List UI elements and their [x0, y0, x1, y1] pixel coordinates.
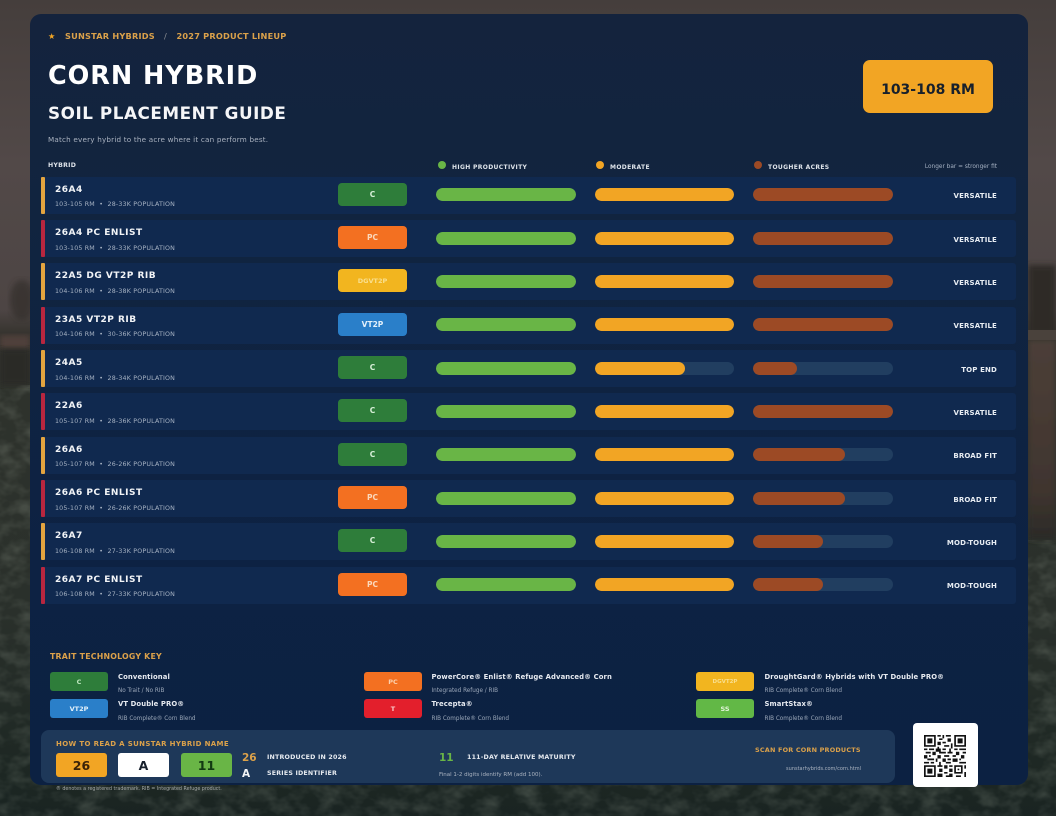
row: 26A7: C — [370, 536, 375, 545]
header eyebrow: SUNSTAR HYBRIDS — [65, 31, 155, 41]
row: 26A7 PC ENLIST: MOD-TOUGH — [947, 582, 997, 590]
trait: PowerCore: PC — [388, 678, 398, 686]
legend: high productivity: HIGH PRODUCTIVITY — [452, 164, 527, 171]
trait: conventional: C — [77, 678, 81, 686]
explanation: series: SERIES IDENTIFIER — [267, 770, 337, 777]
name box: 11: 11 — [198, 758, 215, 773]
trait: PowerCore — [364, 672, 612, 694]
trait key heading: TRAIT TECHNOLOGY KEY — [50, 652, 162, 661]
column header: hybrid: HYBRID — [48, 162, 76, 169]
explanation: maturity: 11 — [439, 752, 454, 764]
row: 22A5 DG VT2P RIB: VERSATILE — [954, 279, 997, 287]
name box: 11 — [181, 753, 232, 777]
tagline: Match every hybrid to the acre where it can perform best. — [48, 135, 268, 144]
row: 26A4 — [41, 177, 1016, 214]
header eyebrow: ★ — [48, 31, 55, 41]
trait: conventional: Conventional — [118, 673, 170, 681]
row: 26A6 PC ENLIST — [41, 480, 1016, 517]
trait: SmartStax: RIB Complete® Corn Blend — [764, 716, 842, 722]
trait: Trecepta: T — [391, 705, 395, 713]
explanation: series — [242, 768, 337, 780]
row: 26A6: 26A6 — [55, 445, 83, 455]
row: 22A6: VERSATILE — [954, 409, 997, 417]
row: 26A7 — [41, 523, 1016, 560]
legend: tougher acres: TOUGHER ACRES — [768, 164, 829, 171]
row: 26A4 PC ENLIST — [41, 220, 1016, 257]
row: 22A5 DG VT2P RIB: DGVT2P — [358, 277, 387, 285]
row: 26A7 PC ENLIST: 106-108 RM • 27-33K POPULATION — [55, 591, 175, 598]
row: 26A4: C — [370, 190, 375, 199]
row: 26A4 PC ENLIST: 103-105 RM • 28-33K POPULATION — [55, 244, 175, 252]
row: 22A6: C — [370, 406, 375, 415]
maturity badge — [863, 60, 993, 113]
explanation: year — [242, 752, 347, 764]
name box: 26: 26 — [73, 758, 90, 773]
trait: VT Double PRO: VT Double PRO® — [118, 700, 184, 708]
scan heading: SCAN FOR CORN PRODUCTS — [755, 746, 861, 754]
row: 22A5 DG VT2P RIB: 22A5 DG VT2P RIB — [55, 271, 156, 281]
row: 22A6: 22A6 — [55, 401, 83, 411]
row: 24A5 — [41, 350, 1016, 387]
row: 23A5 VT2P RIB: 23A5 VT2P RIB — [55, 315, 137, 325]
row: 26A6 PC ENLIST: 105-107 RM • 26-26K POPULATION — [55, 504, 175, 512]
explanation: maturity — [439, 752, 576, 764]
trait: SmartStax: SmartStax® — [764, 700, 813, 708]
trait: Trecepta — [364, 699, 509, 722]
trait: DroughtGard: DroughtGard® Hybrids with VT Double PRO® — [764, 673, 944, 681]
trait: VT Double PRO — [50, 699, 196, 722]
row: 26A6 — [41, 437, 1016, 474]
row: 26A6: C — [370, 450, 375, 459]
trait: Trecepta: Trecepta® — [432, 700, 473, 708]
legend: moderate — [596, 161, 650, 171]
row: 26A7: 26A7 — [55, 531, 83, 541]
row: 22A5 DG VT2P RIB: 104-106 RM • 28-38K POPULATION — [55, 288, 175, 295]
explanation: year: INTRODUCED IN 2026 — [267, 754, 347, 761]
trait: conventional — [50, 672, 170, 694]
row: 26A4: 103-105 RM • 28-33K POPULATION — [55, 201, 175, 208]
footnote: ® denotes a registered trademark. RIB = Integrated Refuge product. — [56, 786, 222, 792]
how to read heading: HOW TO READ A SUNSTAR HYBRID NAME — [56, 740, 229, 748]
row: 24A5: 24A5 — [55, 358, 83, 368]
trait: SmartStax: SS — [720, 705, 730, 713]
trait: DroughtGard — [696, 672, 944, 694]
row: 23A5 VT2P RIB: 104-106 RM • 30-36K POPULATION — [55, 331, 175, 338]
row: 26A7 PC ENLIST: 26A7 PC ENLIST — [55, 575, 143, 585]
trait: Trecepta: RIB Complete® Corn Blend — [432, 716, 509, 722]
legend: moderate: MODERATE — [610, 164, 650, 171]
maturity badge: 103-108 RM — [881, 82, 975, 98]
row: 26A7 PC ENLIST: PC — [367, 580, 378, 589]
row: 26A6 PC ENLIST: BROAD FIT — [953, 496, 997, 504]
maturity note: Final 1-2 digits identify RM (add 100). — [439, 772, 542, 778]
row: 23A5 VT2P RIB: VT2P — [362, 320, 383, 329]
trait: DroughtGard: DGVT2P — [713, 679, 737, 685]
row: 26A6: BROAD FIT — [953, 452, 997, 460]
row: 22A6 — [41, 393, 1016, 430]
name box: A — [118, 753, 169, 777]
QR code — [912, 723, 978, 787]
trait: DroughtGard: RIB Complete® Corn Blend — [764, 688, 842, 694]
row: 26A7: MOD-TOUGH — [947, 539, 997, 547]
title: CORN HYBRID — [48, 61, 258, 91]
row: 23A5 VT2P RIB: VERSATILE — [954, 322, 997, 330]
explanation: maturity: 111-DAY RELATIVE MATURITY — [467, 754, 576, 761]
legend note: Longer bar = stronger fit — [925, 164, 997, 170]
subtitle: SOIL PLACEMENT GUIDE — [48, 103, 286, 123]
row: 24A5: 104-106 RM • 28-34K POPULATION — [55, 374, 175, 382]
legend: tougher acres — [754, 161, 829, 171]
header eyebrow: 2027 PRODUCT LINEUP — [176, 31, 286, 41]
row: 26A4: VERSATILE — [954, 192, 997, 200]
trait: PowerCore: Integrated Refuge / RIB — [432, 688, 498, 694]
explanation: year: 26 — [242, 752, 257, 764]
row: 24A5: TOP END — [961, 366, 997, 374]
row: 22A6: 105-107 RM • 28-36K POPULATION — [55, 418, 175, 425]
header eyebrow — [48, 31, 286, 41]
trait: VT Double PRO: RIB Complete® Corn Blend — [118, 716, 196, 722]
trait: PowerCore: PowerCore® Enlist® Refuge Advanced® Corn — [432, 673, 612, 681]
row: 26A4: 26A4 — [55, 185, 83, 195]
explanation: series: A — [242, 768, 250, 780]
row: 26A4 PC ENLIST: VERSATILE — [954, 236, 997, 244]
row: 24A5: C — [370, 363, 375, 372]
row: 26A7 PC ENLIST — [41, 567, 1016, 604]
row: 22A5 DG VT2P RIB — [41, 263, 1016, 300]
header eyebrow: / — [164, 31, 167, 41]
name box: A: A — [139, 758, 148, 773]
trait: conventional: No Trait / No RIB — [118, 688, 164, 694]
how to read panel — [41, 730, 895, 783]
row: 26A4 PC ENLIST: 26A4 PC ENLIST — [55, 228, 143, 238]
name box: 26 — [56, 753, 107, 777]
row: 26A6 PC ENLIST: PC — [367, 493, 378, 502]
legend: high productivity — [438, 161, 527, 171]
trait: VT Double PRO: VT2P — [70, 705, 88, 713]
row: 26A4 PC ENLIST: PC — [367, 233, 378, 242]
row: 26A6: 105-107 RM • 26-26K POPULATION — [55, 461, 175, 468]
row: 23A5 VT2P RIB — [41, 307, 1016, 344]
row: 26A7: 106-108 RM • 27-33K POPULATION — [55, 548, 175, 555]
trait: SmartStax — [696, 699, 842, 722]
url: sunstarhybrids.com/corn.html — [786, 766, 861, 772]
row: 26A6 PC ENLIST: 26A6 PC ENLIST — [55, 488, 143, 498]
